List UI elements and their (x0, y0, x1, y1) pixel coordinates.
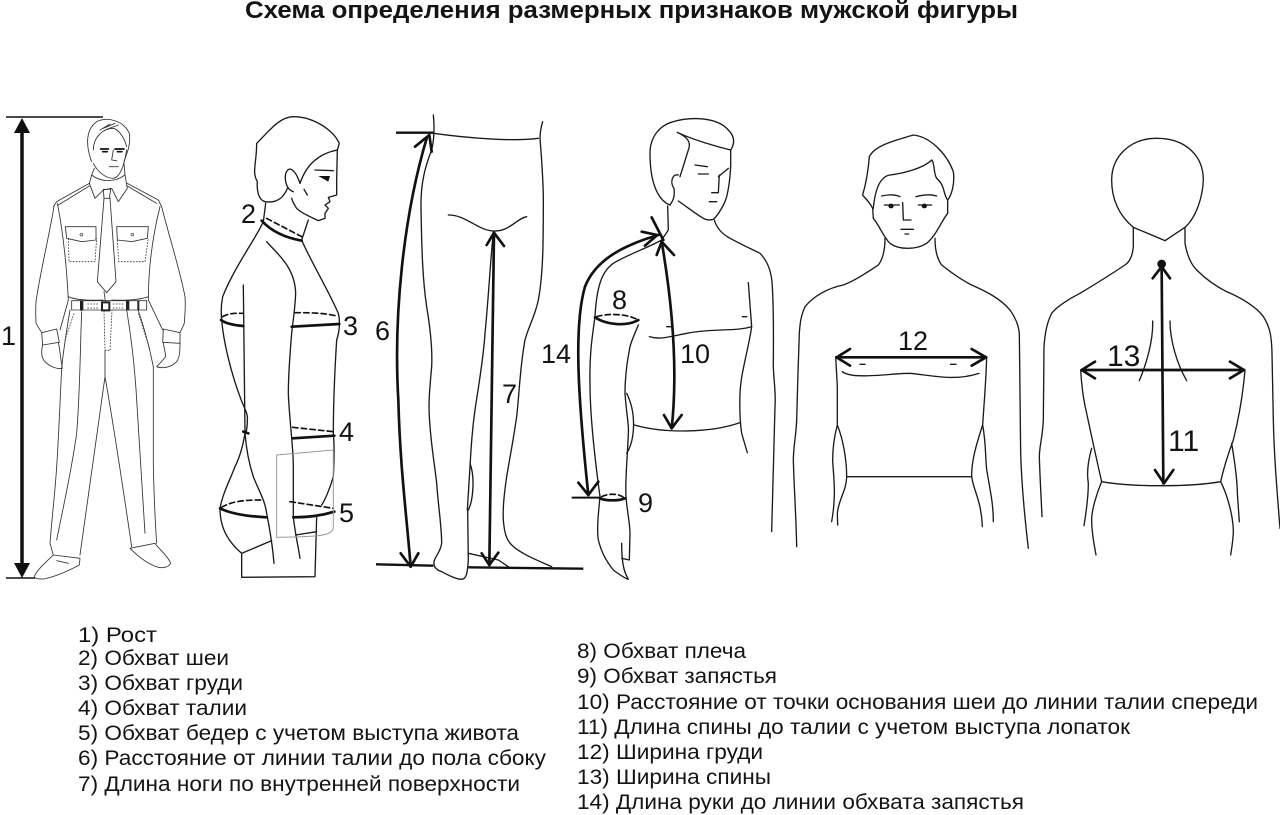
arrow 14: arm length (578, 232, 658, 495)
hip girth line (220, 500, 334, 517)
measurement numbers on figures: 6 (375, 316, 390, 346)
arrow 7: inner leg (482, 233, 504, 565)
arm girth line (595, 314, 638, 324)
measurement numbers on figures: 4 (339, 417, 354, 447)
figure 2: torso in profile (220, 117, 339, 577)
arrow 1: height (6, 117, 103, 578)
arrow 11: back length (1153, 260, 1173, 483)
measurement numbers on figures: 11 (1168, 425, 1199, 458)
figure 3: legs (376, 115, 583, 579)
measurement numbers on figures: 5 (339, 498, 354, 528)
legend right column: 13) Ширина спины (577, 765, 771, 789)
neck girth line (262, 218, 302, 241)
belly protrusion box (277, 450, 333, 537)
legend left column: 5) Обхват бедер с учетом выступа живота (78, 721, 519, 745)
legend left column: 6) Расстояние от линии талии до пола сбоку (78, 746, 546, 770)
legend left column: 4) Обхват талии (78, 696, 247, 720)
measurement numbers on figures: 2 (241, 199, 256, 229)
figure 1: full figure in shirt and trousers (35, 119, 185, 579)
figure 4: three-quarter torso with arm (572, 119, 775, 579)
legend right column: 11) Длина спины до талии с учетом выступа лопаток (577, 715, 1131, 739)
legend left column: 7) Длина ноги по внутренней поверхности (78, 772, 520, 796)
figure 6: back torso (1039, 138, 1280, 555)
measurement numbers on figures: 10 (680, 339, 710, 369)
waist girth line (243, 427, 334, 438)
legend right column: 12) Ширина груди (577, 740, 763, 764)
chest girth line (221, 313, 339, 327)
measurement numbers on figures (1, 199, 1199, 528)
measurement numbers on figures: 8 (612, 285, 627, 315)
floor and waist level lines (376, 133, 583, 569)
figure 5: front torso (793, 135, 1028, 548)
legend right column: 14) Длина руки до линии обхвата запястья (577, 790, 1024, 814)
arrow 10: neck base to waist (652, 217, 682, 428)
legend right column: 10) Расстояние от точки основания шеи до линии талии спереди (577, 690, 1258, 714)
legend left column (78, 623, 546, 796)
measurement numbers on figures: 9 (638, 488, 653, 518)
legend left column: 2) Обхват шеи (78, 646, 229, 670)
measurement numbers on figures: 1 (1, 321, 16, 351)
arrow 13: back width (1082, 362, 1244, 378)
measurement numbers on figures: 7 (502, 379, 517, 409)
legend right column: 9) Обхват запястья (577, 664, 777, 688)
legend left column: 1) Рост (78, 623, 157, 647)
measurement numbers on figures: 14 (541, 339, 571, 369)
wrist girth line (572, 494, 625, 500)
arrow 12: chest width (837, 349, 986, 366)
legend left column: 3) Обхват груди (78, 671, 243, 695)
legend right column (577, 639, 1258, 814)
measurement numbers on figures: 13 (1107, 340, 1140, 373)
arrow 6: waist to floor (397, 135, 432, 567)
measurement numbers on figures: 12 (898, 326, 928, 356)
measurement numbers on figures: 3 (343, 311, 358, 341)
legend right column: 8) Обхват плеча (577, 639, 746, 663)
